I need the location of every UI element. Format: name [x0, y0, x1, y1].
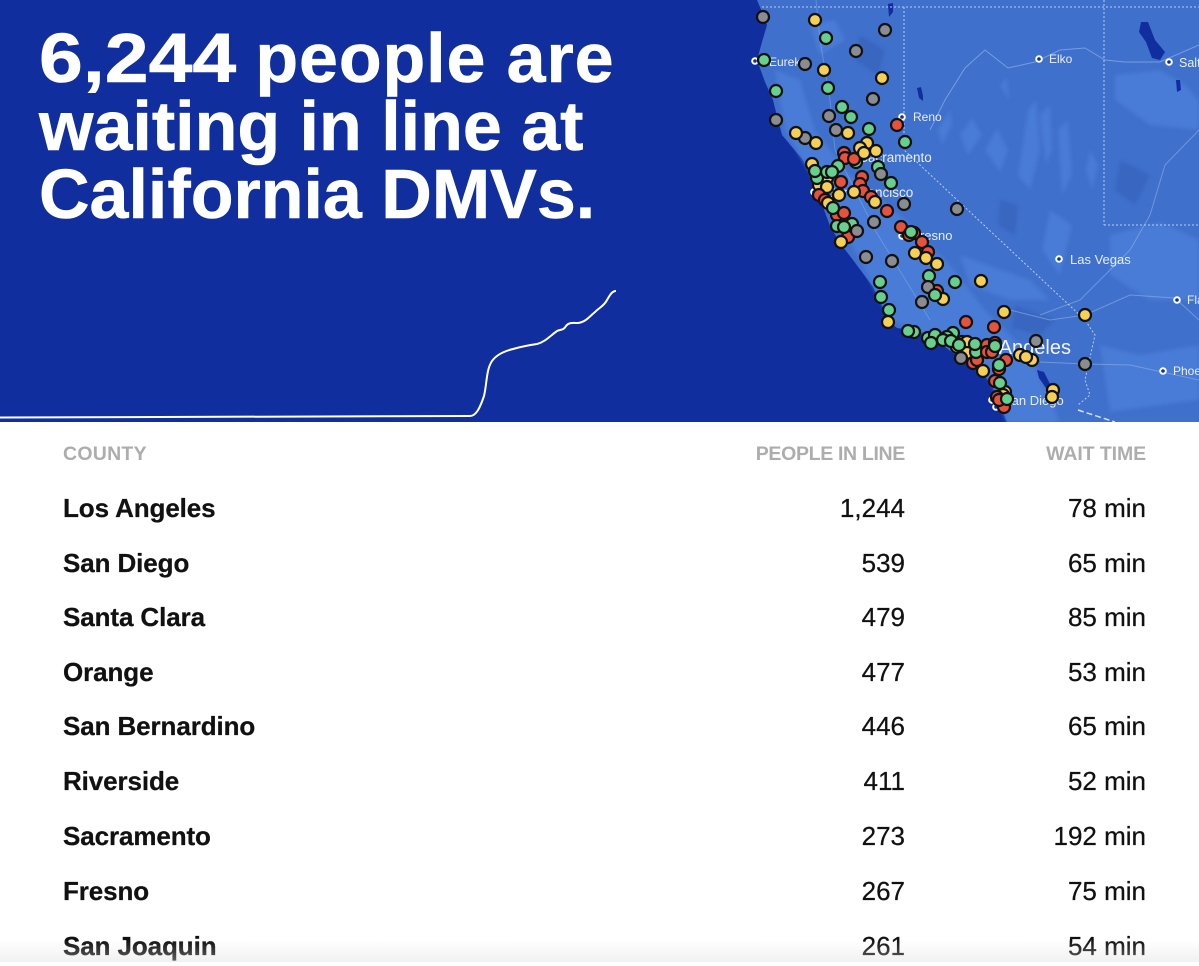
row: San Bernardino: [63, 711, 1146, 741]
row: Los Angeles: 1,244: [840, 493, 905, 523]
row: San Bernardino: San Bernardino: [63, 711, 255, 741]
table header: COUNTY: [63, 443, 147, 465]
row: Santa Clara: 479: [862, 602, 905, 632]
row: San Diego: 539: [862, 548, 905, 578]
row: Santa Clara: 85 min: [1068, 602, 1146, 632]
row: San Diego: 65 min: [1068, 548, 1146, 578]
row: San Diego: [63, 548, 1146, 578]
title: waiting in line at: [39, 87, 583, 165]
row: Riverside: 52 min: [1068, 766, 1146, 796]
row: Orange: [63, 657, 1146, 687]
table header: WAIT TIME: [1046, 443, 1146, 465]
row: Los Angeles: [63, 493, 1146, 523]
city labels: Eureka: [769, 55, 807, 69]
city labels: San Diego: [1003, 393, 1064, 408]
row: Fresno: [63, 876, 1146, 906]
city labels: Las Vegas: [1070, 252, 1131, 267]
row: San Bernardino: 446: [862, 711, 905, 741]
table header: PEOPLE IN LINE: [756, 443, 905, 465]
row: San Joaquin: San Joaquin: [63, 931, 216, 961]
city labels: Reno: [913, 110, 942, 124]
row: Los Angeles: 78 min: [1068, 493, 1146, 523]
row: Santa Clara: [63, 602, 1146, 632]
title: people are: [255, 19, 614, 97]
row: Riverside: [63, 766, 1146, 796]
panel: blue header: [0, 0, 1199, 422]
row: San Joaquin: [63, 931, 1146, 961]
row: San Joaquin: 54 min: [1068, 931, 1146, 961]
title: [38, 19, 614, 233]
map: California DMV locations: [751, 0, 1199, 422]
row: Fresno: 267: [862, 876, 905, 906]
row: San Diego: San Diego: [63, 548, 189, 578]
row: Sacramento: Sacramento: [63, 821, 211, 851]
table header: [63, 443, 1146, 465]
row: Riverside: 411: [864, 766, 905, 796]
row: Riverside: Riverside: [63, 766, 179, 796]
row: Fresno: 75 min: [1068, 876, 1146, 906]
row: Fresno: Fresno: [63, 876, 149, 906]
title: California DMVs.: [39, 155, 595, 233]
city labels: San Francisco: [827, 185, 913, 200]
DMV location dots: [757, 11, 1091, 413]
row: San Bernardino: 65 min: [1068, 711, 1146, 741]
row: Santa Clara: Santa Clara: [63, 602, 205, 632]
city labels: Fresno: [912, 228, 952, 243]
title: 6,244: [39, 19, 236, 97]
roads and state borders: [816, 0, 1199, 380]
row: Sacramento: [63, 821, 1146, 851]
row: Sacramento: 192 min: [1054, 821, 1146, 851]
line chart: people in line over time: [0, 290, 616, 418]
bottom fade: [0, 940, 1199, 962]
city labels: Los Angeles: [962, 337, 1071, 359]
row: Los Angeles: Los Angeles: [63, 493, 216, 523]
panel: county table: [63, 443, 1146, 961]
row: Orange: 53 min: [1068, 657, 1146, 687]
row: Orange: Orange: [63, 657, 153, 687]
land mass: [757, 0, 1199, 422]
row: San Joaquin: 261: [862, 931, 905, 961]
row: Orange: 477: [862, 657, 905, 687]
city labels: Elko: [1049, 52, 1073, 66]
water bodies: [888, 3, 1181, 396]
city labels: Sacramento: [859, 150, 932, 165]
row: Sacramento: 273: [862, 821, 905, 851]
city labels: [752, 52, 1199, 410]
